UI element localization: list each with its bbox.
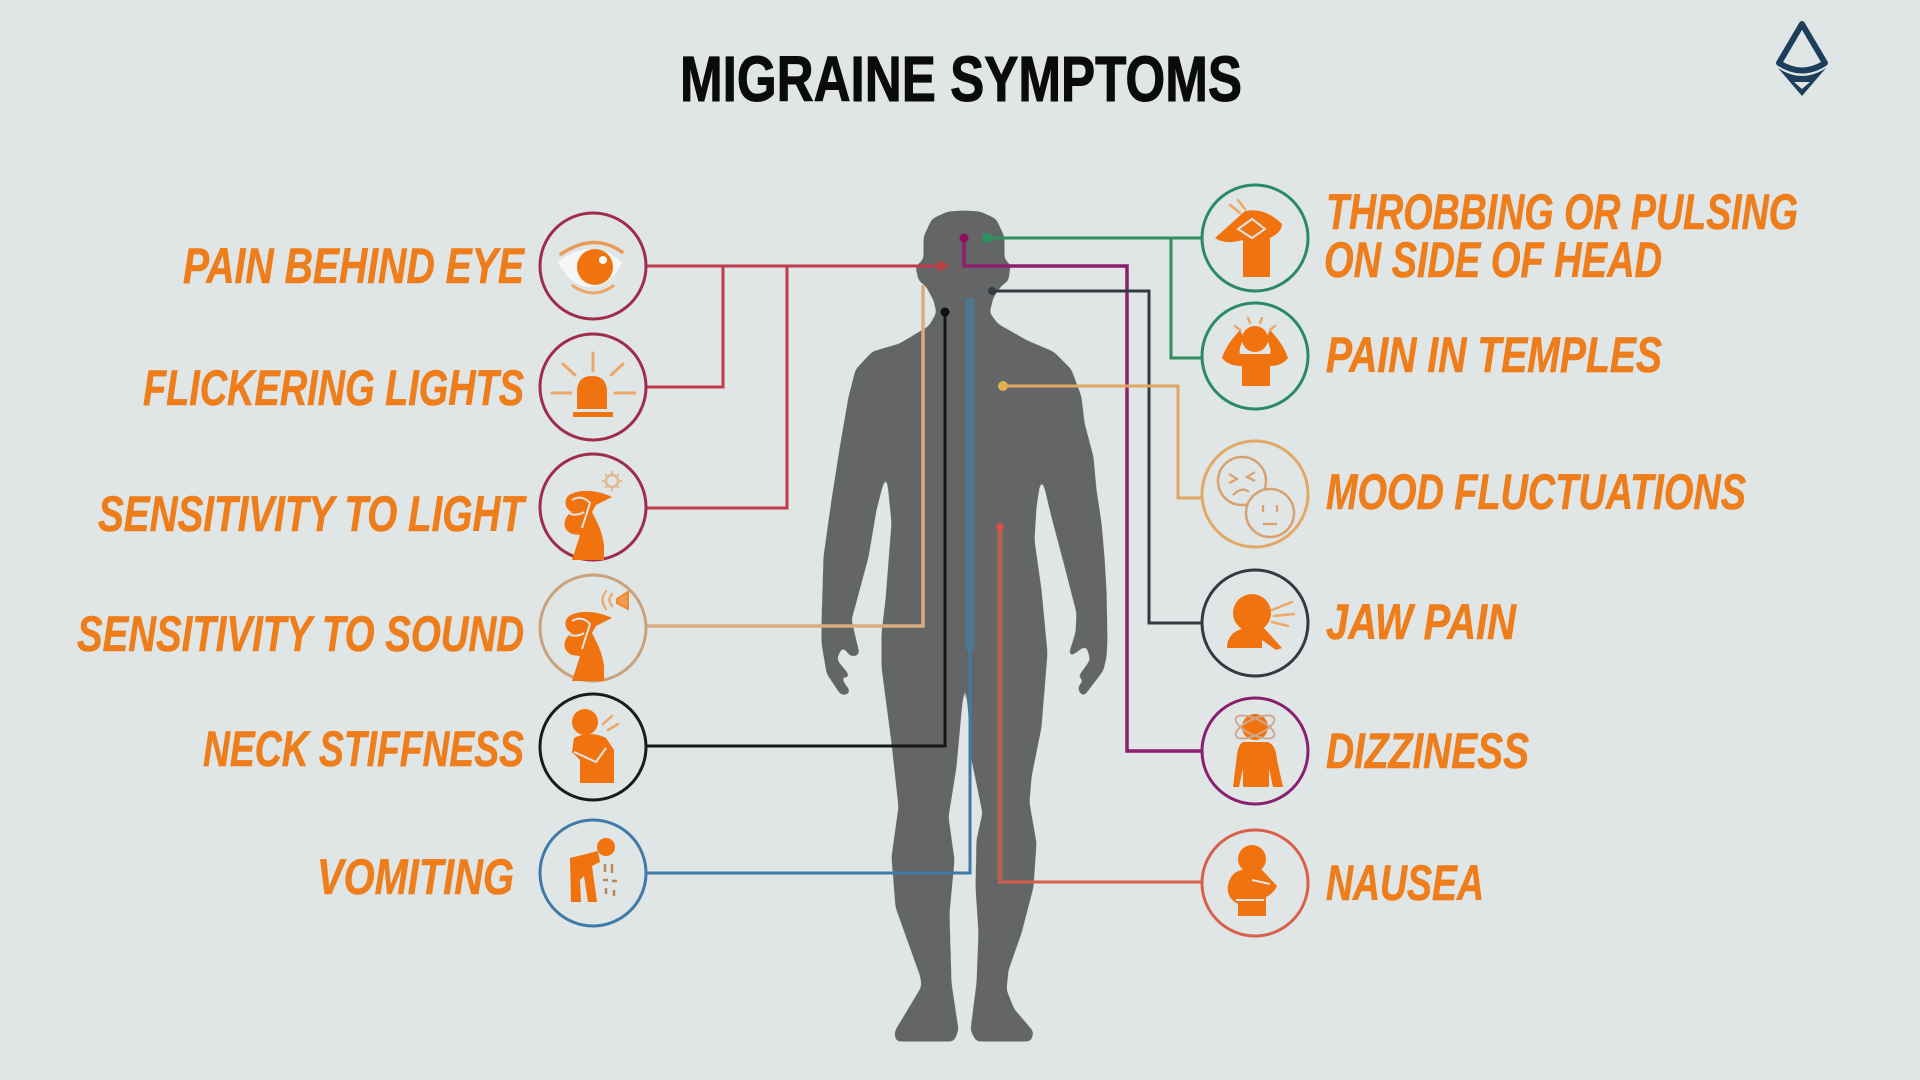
symptom: throbbing or pulsing on side of head: ON SIDE OF HEAD (1324, 232, 1662, 288)
symptom: throbbing or pulsing on side of head (1202, 184, 1798, 291)
connector: mood fluctuations (998, 381, 1201, 498)
symptom: sensitivity to sound: SENSITIVITY TO SOUND (77, 606, 524, 662)
connector: throbbing (982, 233, 1201, 243)
connector: nausea (996, 523, 1201, 882)
symptom: nausea: NAUSEA (1326, 855, 1484, 911)
symptom: mood fluctuations (1202, 441, 1746, 547)
symptom: neck stiffness: NECK STIFFNESS (203, 721, 524, 777)
symptom: sensitivity to sound (77, 575, 646, 681)
symptom: neck stiffness (203, 694, 646, 800)
symptom: flickering lights: FLICKERING LIGHTS (143, 360, 524, 416)
symptom: pain in temples (1202, 303, 1662, 409)
icon: logo (1778, 24, 1826, 96)
connector: flickering lights (647, 266, 723, 387)
symptom: flickering lights (143, 334, 646, 440)
human body silhouette (823, 212, 1106, 1040)
symptom: sensitivity to light: SENSITIVITY TO LIGHT (98, 486, 527, 542)
connector: sensitivity to sound (647, 285, 923, 626)
symptom: mood fluctuations: MOOD FLUCTUATIONS (1326, 464, 1746, 520)
connector: neck stiffness (647, 308, 950, 746)
symptom: pain in temples: PAIN IN TEMPLES (1326, 327, 1662, 383)
connector: sensitivity to light (647, 266, 787, 508)
symptom: vomiting: VOMITING (317, 849, 514, 905)
connector: pain in temples (1171, 238, 1201, 358)
symptom: dizziness (1202, 698, 1529, 804)
symptom: sensitivity to light (98, 454, 646, 560)
symptom: pain behind eye (183, 213, 646, 319)
connector: jaw pain (988, 287, 1201, 623)
title: MIGRAINE SYMPTOMS (680, 43, 1242, 115)
symptom: dizziness: DIZZINESS (1326, 723, 1529, 779)
symptom: vomiting (317, 820, 646, 926)
connector: vomiting (647, 298, 970, 873)
symptom: pain behind eye: PAIN BEHIND EYE (183, 238, 525, 294)
connector: pain behind eye (647, 260, 950, 272)
symptom: jaw pain (1202, 570, 1517, 676)
connector: dizziness (960, 234, 1201, 751)
symptom: nausea (1202, 830, 1484, 936)
symptom: jaw pain: JAW PAIN (1326, 594, 1517, 650)
